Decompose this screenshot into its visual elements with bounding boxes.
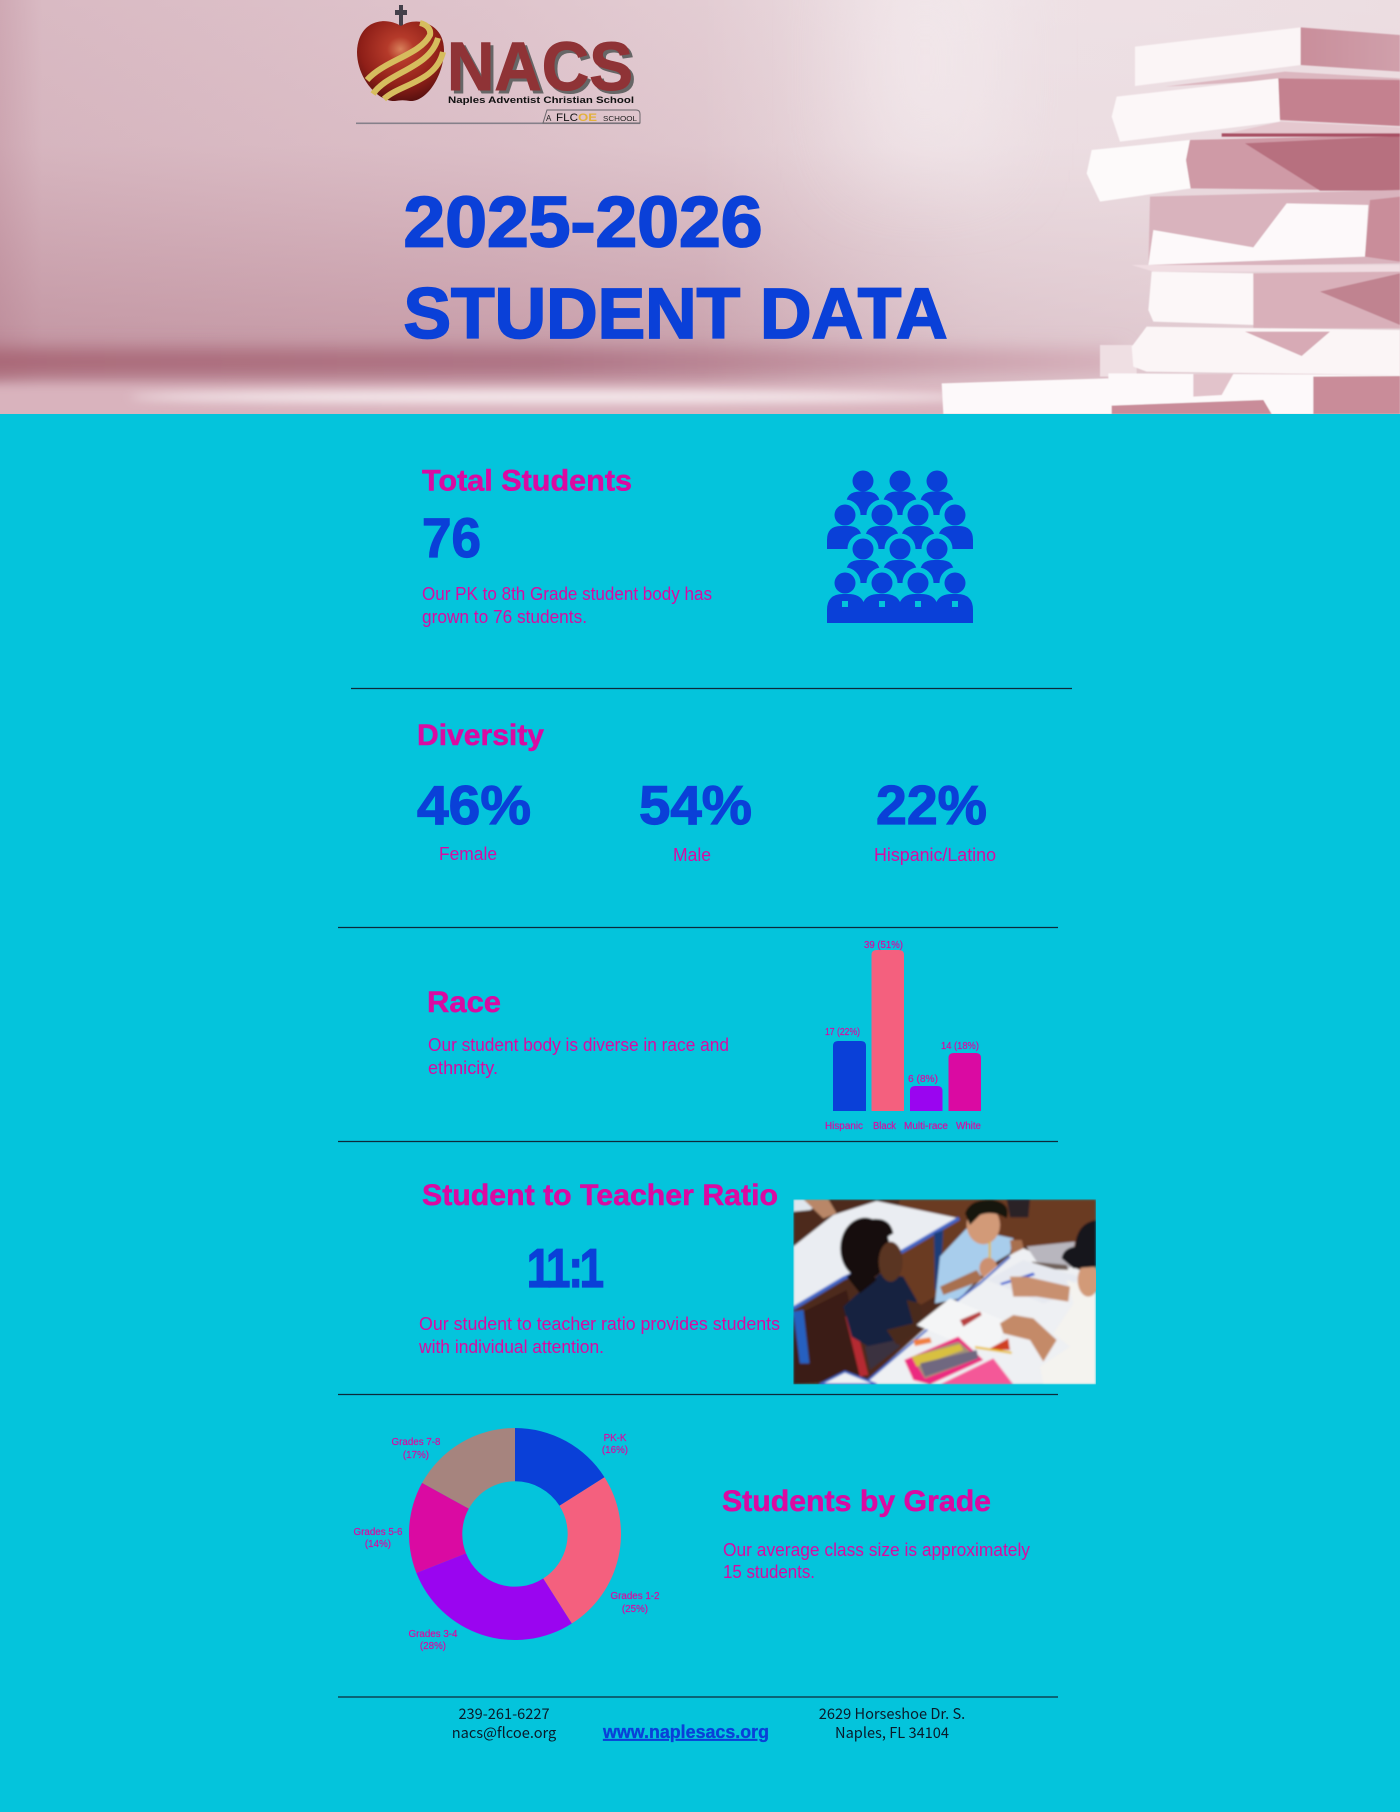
bar category labels: Black <box>873 1121 896 1132</box>
logo FLCOE badge: A <box>546 114 552 123</box>
donut chart: grades <box>353 1428 660 1652</box>
bar: white <box>948 1053 981 1111</box>
logo FLCOE badge <box>356 110 640 124</box>
bar category labels: Multi-race <box>904 1121 949 1132</box>
segment: grades 3-4 <box>416 1553 572 1640</box>
segment: grades 5-6 <box>409 1483 469 1573</box>
stat: 22% hispanic latino <box>874 774 996 865</box>
donut labels: (14%) <box>365 1539 391 1550</box>
bar: black <box>872 950 904 1111</box>
bar category labels <box>825 1121 982 1132</box>
panel: diversity <box>417 719 996 865</box>
text: ratio note: Our student to teacher ratio provides students <box>419 1313 780 1334</box>
stat: 46% female: Female <box>439 843 497 864</box>
logo FLCOE badge: OE <box>578 112 597 124</box>
bar value labels <box>825 940 979 1085</box>
text: phone and email <box>452 1703 557 1743</box>
text: ratio note: with individual attention. <box>418 1336 604 1357</box>
heading: students by grade: Students by Grade <box>722 1485 991 1518</box>
logo FLCOE badge: FLC <box>556 112 578 124</box>
donut labels: Grades 5-6 <box>353 1527 403 1538</box>
bar category labels: Hispanic <box>825 1121 863 1132</box>
panel: header banner <box>0 0 1400 424</box>
number: 76: 76 <box>422 506 481 569</box>
text: phone and email: 239-261-6227 <box>458 1703 550 1724</box>
title <box>404 195 947 340</box>
bar value labels: 6 (8%) <box>908 1074 938 1085</box>
heading: race: Race <box>427 986 501 1019</box>
bar: multi-race <box>910 1086 942 1111</box>
segment: PK-K <box>515 1428 604 1506</box>
icon: crowd of students <box>827 470 973 623</box>
heading: ratio: Student to Teacher Ratio <box>422 1179 778 1212</box>
bar value labels: 17 (22%) <box>825 1027 860 1038</box>
heading: diversity: Diversity <box>417 719 544 752</box>
stat: 46% female: 46% <box>417 774 531 836</box>
stat: 54% male: Male <box>673 844 711 865</box>
donut labels: (17%) <box>403 1450 429 1461</box>
bar chart: race <box>825 940 982 1132</box>
logo tagline: Naples Adventist Christian School <box>448 95 634 106</box>
text: website: www.naplesacs.org <box>602 1722 769 1742</box>
text: ratio note <box>418 1313 780 1357</box>
bar category labels: White <box>956 1121 982 1132</box>
heading: total students: Total Students <box>422 464 632 498</box>
stat: 22% hispanic latino: 22% <box>876 774 987 836</box>
donut labels: Grades 1-2 <box>610 1591 660 1602</box>
text: address: 2629 Horseshoe Dr. S. <box>819 1703 965 1724</box>
book stack image <box>942 27 1400 414</box>
panel: students by grade <box>353 1428 1031 1652</box>
donut labels: (16%) <box>602 1445 628 1456</box>
stat: 54% male: 54% <box>639 774 752 836</box>
text: student body note: grown to 76 students. <box>422 606 587 627</box>
stat: 22% hispanic latino: Hispanic/Latino <box>874 844 996 865</box>
text: address <box>819 1703 965 1743</box>
panel: student to teacher ratio <box>418 1179 1099 1384</box>
text: class size note: Our average class size is approximately <box>723 1539 1031 1560</box>
text: student body note <box>422 583 712 627</box>
text: class size note: 15 students. <box>723 1561 815 1582</box>
NACS school logo <box>356 5 640 124</box>
bar: hispanic <box>833 1041 866 1111</box>
bar value labels: 39 (51%) <box>864 940 903 951</box>
panel: footer contact <box>452 1703 965 1743</box>
banner background photo wash <box>0 0 1400 424</box>
title: STUDENT DATA <box>404 275 948 354</box>
logo wordmark NACS: NACS <box>447 28 633 105</box>
text: race note: Our student body is diverse in race and <box>428 1034 729 1055</box>
text: phone and email: nacs@flcoe.org <box>452 1722 557 1743</box>
logo FLCOE badge: SCHOOL <box>603 114 637 123</box>
panel: race <box>427 940 982 1132</box>
donut labels: PK-K <box>604 1433 627 1444</box>
stat: 46% female <box>417 774 531 864</box>
segment: grades 1-2 <box>543 1477 621 1624</box>
donut labels: (28%) <box>420 1641 446 1652</box>
text: race note <box>428 1034 729 1078</box>
icon: apple with cross <box>357 5 444 101</box>
panel: total students <box>422 464 973 627</box>
text: class size note <box>723 1539 1031 1582</box>
text: race note: ethnicity. <box>428 1057 498 1078</box>
number: 11:1: 11:1 <box>527 1237 604 1299</box>
bar value labels: 14 (18%) <box>941 1041 979 1052</box>
donut labels <box>353 1433 660 1652</box>
donut labels: Grades 7-8 <box>391 1437 441 1448</box>
segment: grades 7-8 <box>422 1428 515 1509</box>
photo: students in classroom <box>793 1199 1099 1384</box>
donut labels: (25%) <box>622 1604 648 1615</box>
stat: 54% male <box>639 774 752 865</box>
donut labels: Grades 3-4 <box>408 1629 458 1640</box>
text: address: Naples, FL 34104 <box>835 1722 949 1743</box>
text: student body note: Our PK to 8th Grade student body has <box>422 583 712 604</box>
title: 2025-2026 <box>404 184 762 262</box>
